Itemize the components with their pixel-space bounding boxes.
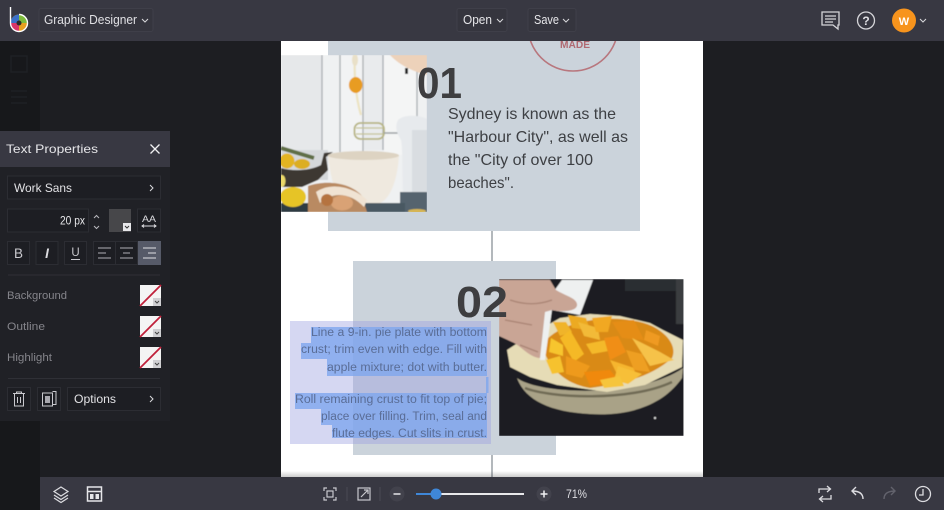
button: Open — [457, 8, 507, 32]
align centre button — [116, 242, 138, 264]
bottom toolbar — [40, 477, 944, 510]
zoom in button — [536, 486, 552, 502]
icon: comment — [822, 12, 839, 29]
icon: fit to screen — [324, 488, 336, 500]
icon: redo — [884, 487, 895, 499]
swatch: outline none — [140, 316, 161, 337]
stamp badge — [528, 0, 618, 71]
icon: help — [858, 12, 874, 29]
page bottom shadow — [281, 471, 703, 477]
text block: Sydney: the "City of over 100 — [448, 152, 593, 169]
options button: Options — [74, 392, 116, 406]
user avatar — [892, 8, 926, 32]
panel: step 1 background — [328, 41, 640, 231]
label: Background: Background — [7, 290, 67, 302]
options button — [68, 388, 160, 410]
panel: text properties — [0, 131, 170, 421]
text block: Sydney: Sydney is known as the — [448, 106, 616, 123]
button: Graphic Designer: Graphic Designer — [44, 13, 137, 27]
text colour swatch — [109, 209, 131, 232]
font size input — [8, 209, 99, 232]
italic button — [36, 242, 58, 264]
connector line — [491, 231, 493, 477]
icon: expand — [358, 488, 370, 500]
heading: 02: 02 — [456, 278, 508, 327]
user avatar: W — [899, 16, 910, 28]
button: Save — [528, 8, 576, 32]
bold button — [8, 242, 30, 264]
top toolbar — [0, 0, 944, 41]
canvas page — [278, 0, 703, 477]
selection highlights — [295, 327, 488, 438]
logo — [10, 7, 28, 32]
letter spacing button: AA — [142, 214, 157, 225]
align right button active — [138, 241, 161, 265]
left sidebar — [0, 41, 40, 510]
zoom out button — [390, 486, 404, 502]
button: Open: Open — [463, 13, 492, 27]
selected text frame — [290, 321, 491, 444]
text block: pie instructions — [295, 327, 487, 440]
font selector — [8, 176, 160, 199]
icon: undo — [852, 487, 863, 499]
button: Save: Save — [534, 13, 559, 27]
zoom value: 71% — [566, 489, 587, 501]
swatch: highlight none — [140, 347, 161, 368]
text block: pie instructions: place over filling. Trim, seal and — [321, 411, 487, 423]
underline button — [64, 242, 86, 264]
italic button: I — [45, 246, 49, 261]
font selector: Work Sans — [14, 181, 72, 195]
text block: pie instructions: Line a 9-in. pie plate with bottom — [311, 327, 487, 339]
icon: swap — [819, 486, 831, 502]
icon: delete — [8, 388, 30, 410]
text block: pie instructions: flute edges. Cut slits in crust. — [332, 428, 487, 440]
font size input: 20 px — [60, 216, 85, 228]
zoom slider — [416, 488, 524, 500]
stamp badge: MADE — [560, 40, 590, 51]
panel: step 2 background — [353, 261, 556, 455]
text block: Sydney: "Harbour City", as well as — [448, 129, 628, 146]
photo: pie with peaches — [499, 279, 684, 436]
text block: pie instructions: crust; trim even with edge. Fill with — [301, 344, 487, 356]
label: Outline: Outline — [7, 321, 45, 333]
text block: Sydney: beaches". — [448, 175, 514, 192]
text block: Sydney — [448, 106, 628, 192]
bold button: B — [14, 246, 23, 261]
panel header: Text Properties — [6, 142, 98, 156]
text block: pie instructions: apple mixture; dot with butter. — [327, 362, 487, 374]
heading: 01: 01 — [417, 59, 462, 108]
button: Graphic Designer — [39, 8, 153, 32]
text block: pie instructions: Roll remaining crust to fit top of pie; — [295, 394, 487, 406]
panel header — [0, 131, 170, 167]
icon: layers — [54, 487, 68, 502]
underline button: U — [71, 247, 80, 259]
icon: layout — [88, 487, 102, 501]
swatch: background none — [140, 285, 161, 306]
icon: help: ? — [862, 14, 870, 28]
icon: duplicate — [38, 388, 60, 410]
align left button — [94, 242, 116, 264]
label: Highlight: Highlight — [7, 352, 52, 364]
letter spacing button — [138, 209, 160, 232]
icon: history — [916, 486, 930, 502]
photo: kitchen mixing bowl — [278, 54, 427, 213]
